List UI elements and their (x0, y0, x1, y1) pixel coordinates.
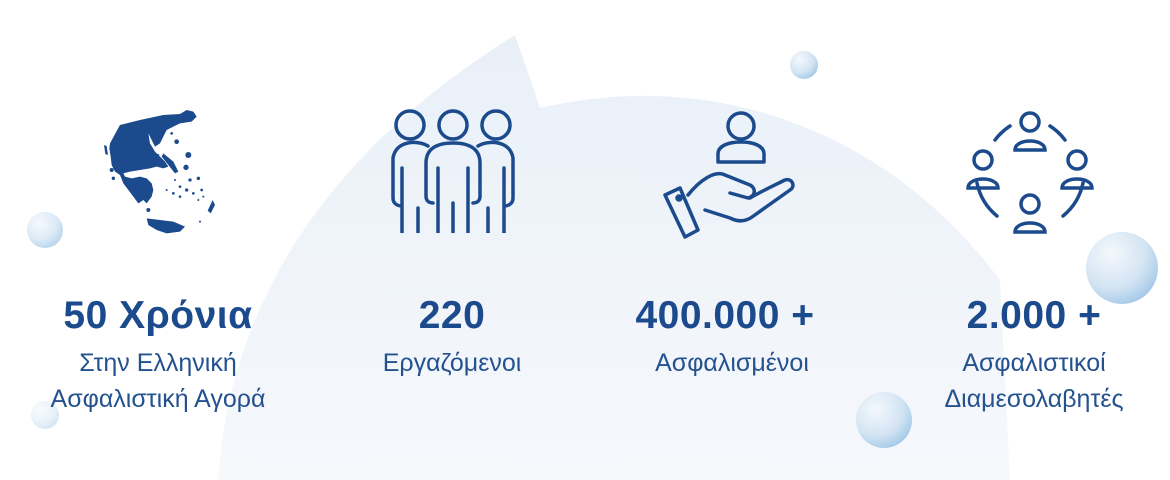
stat: 2000: 2.000 + (967, 294, 1101, 337)
icon: Greece map (104, 110, 215, 234)
icon: network of people (966, 111, 1094, 234)
label: market (50, 349, 265, 413)
label: intermediaries (944, 349, 1124, 413)
label: insured: Ασφαλισμένοι (655, 349, 809, 377)
label: market: Ασφαλιστική Αγορά (51, 385, 265, 413)
icon: employees (391, 109, 515, 233)
label: market: Στην Ελληνική (79, 349, 237, 377)
label: intermediaries: Ασφαλιστικοί (962, 349, 1106, 377)
stat: 400000: 400.000 + (635, 294, 815, 337)
stat: 50 years: 50 Χρόνια (63, 294, 253, 337)
label: employees: Εργαζόμενοι (383, 349, 521, 377)
label: intermediaries: Διαμεσολαβητές (944, 385, 1124, 413)
stat: 220: 220 (419, 294, 485, 337)
icon: hand with person (663, 111, 795, 239)
